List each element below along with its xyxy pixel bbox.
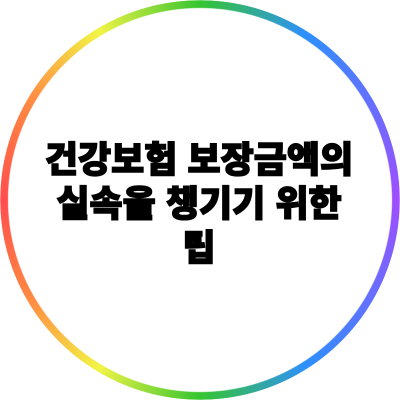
title: 팁 (182, 219, 216, 271)
title: 건강보험 보장금액의 (45, 131, 353, 183)
title (45, 131, 353, 271)
title: 실속을 챙기기 위한 (56, 175, 342, 227)
